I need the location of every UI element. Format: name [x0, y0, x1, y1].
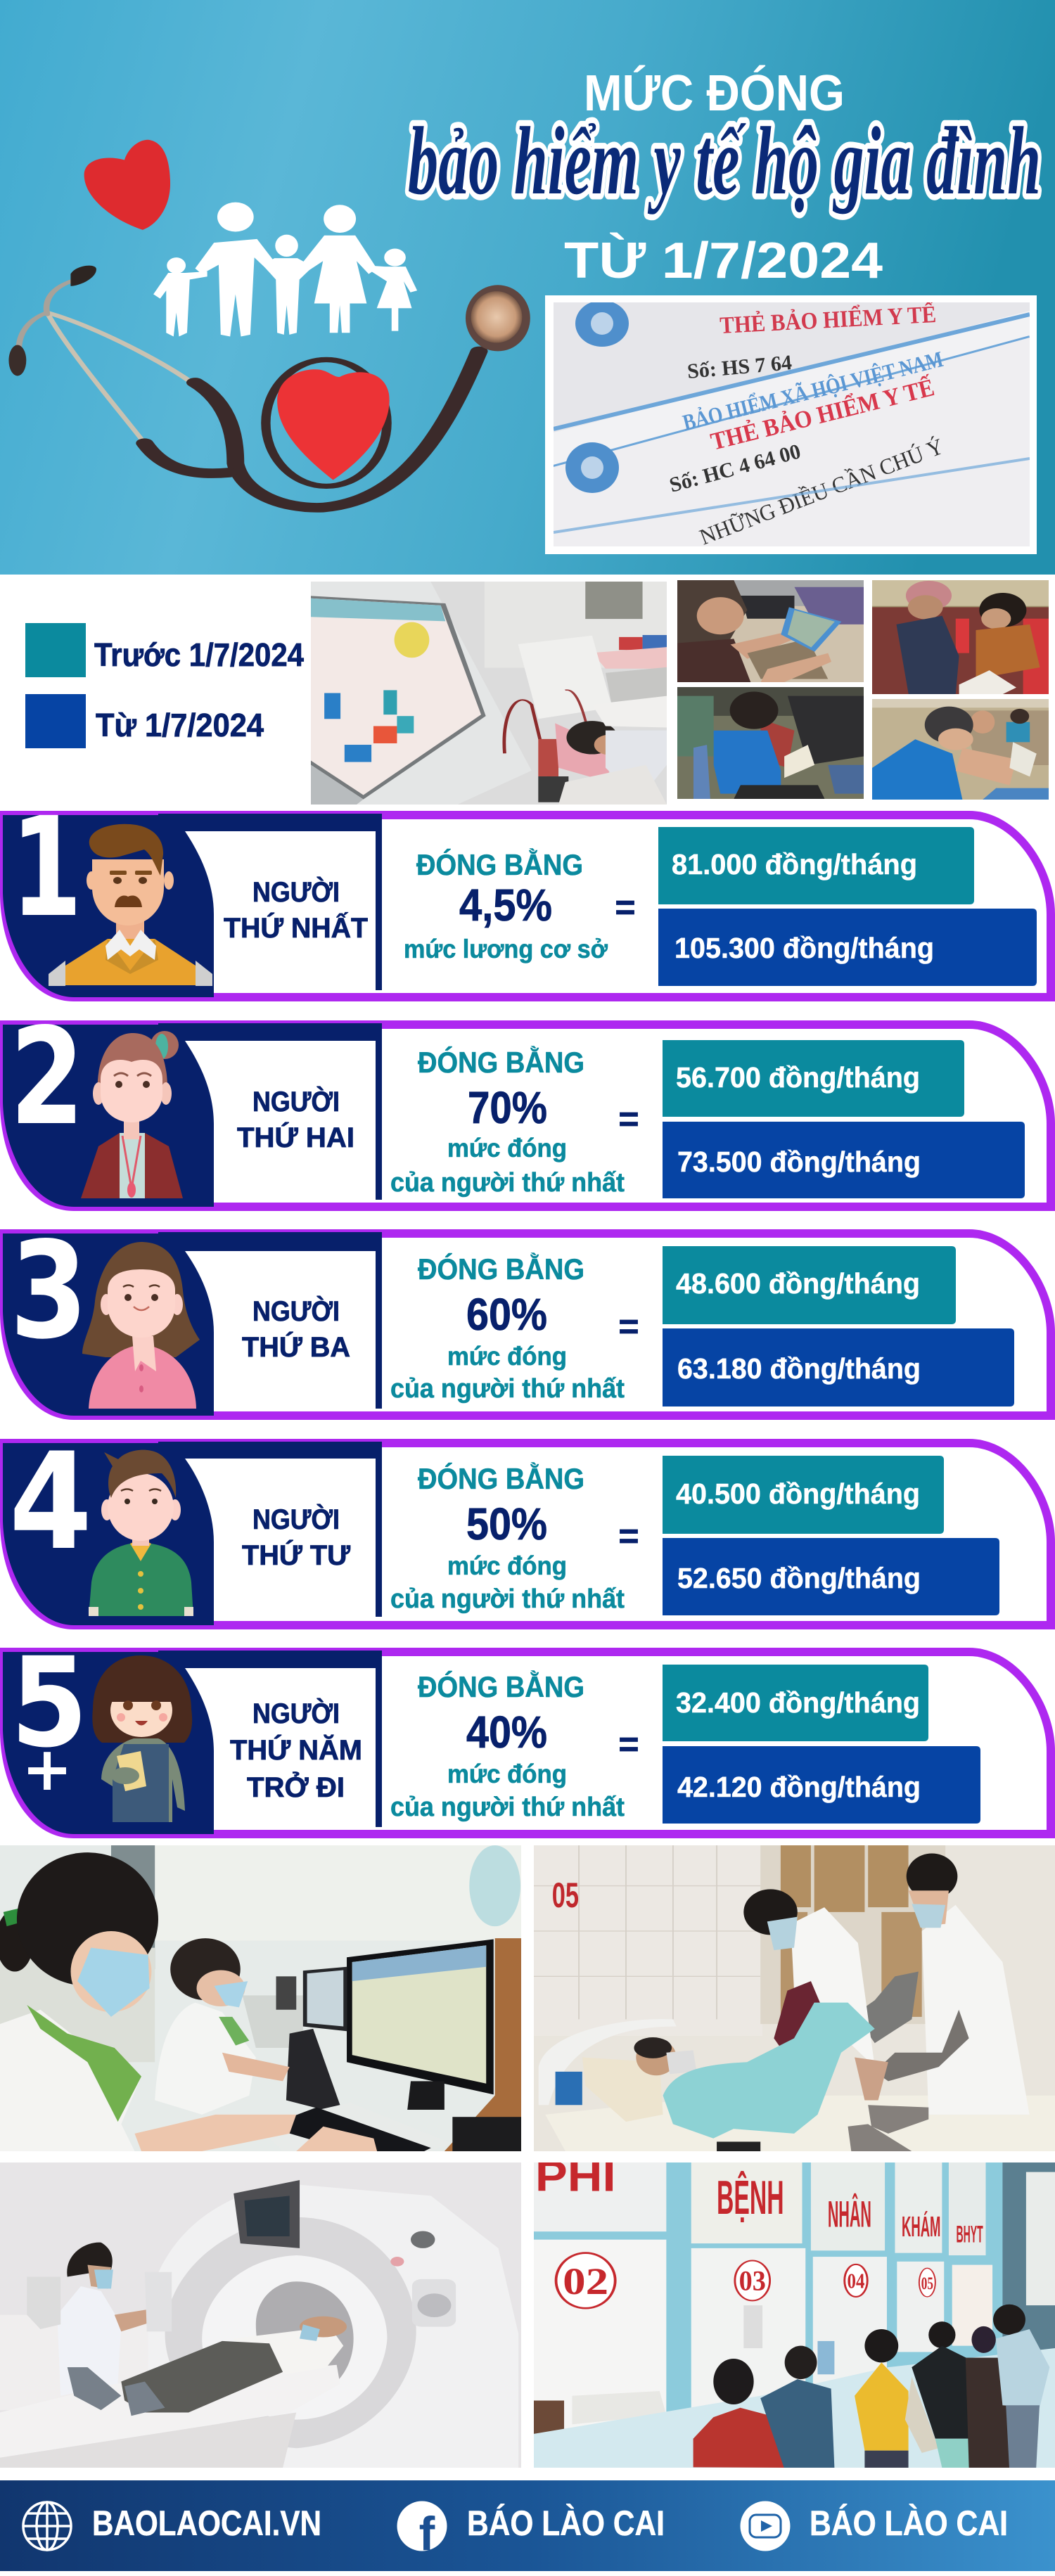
row label: NGƯỜI	[252, 1503, 340, 1535]
legend label: before: Trước 1/7/2024	[94, 636, 304, 673]
icon: globe	[23, 2502, 71, 2550]
photo: hospital reception nurses	[0, 1845, 521, 2151]
bar after	[658, 909, 1037, 986]
photo: hospital counters: NHÂN	[828, 2193, 871, 2235]
left navy tab	[3, 814, 382, 997]
panel: card 5: THỨ NĂM	[230, 1734, 362, 1766]
bar after value: 105.300 đồng/tháng	[674, 932, 934, 964]
equals sign: =	[615, 887, 636, 927]
counter signage: PHÍ	[535, 2153, 618, 2200]
photo: insurance cards: NHỮNG ĐIỀU CẦN CHÚ Ý	[696, 433, 947, 550]
number: 5	[11, 1631, 88, 1775]
bar before	[663, 1040, 964, 1117]
rate heading: ĐÓNG BẰNG	[416, 847, 583, 881]
photo: staff in blue shirt	[872, 699, 1049, 800]
bar before value: 81.000 đồng/tháng	[672, 848, 917, 880]
bar before value: 56.700 đồng/tháng	[676, 1061, 920, 1094]
legend swatch: before	[25, 623, 86, 677]
rate value: 70%	[468, 1082, 547, 1133]
photo: insurance cards	[545, 295, 1037, 554]
avatar: boy in green shirt	[89, 1450, 193, 1616]
panel: card 5	[0, 1631, 1055, 1838]
title line: mức đóng: MỨC ĐÓNG	[584, 65, 845, 122]
rate basis: mức lương cơ sở	[404, 935, 608, 963]
rate heading: ĐÓNG BẰNG	[418, 1252, 584, 1286]
photo: hospital counters: 05	[921, 2273, 933, 2293]
equals sign: =	[618, 1307, 639, 1346]
photo: hospital counters: BHYT	[956, 2222, 983, 2248]
number: 4	[9, 1424, 92, 1579]
bar before value: 40.500 đồng/tháng	[676, 1478, 920, 1510]
left navy tab	[3, 1651, 382, 1834]
left navy tab	[3, 1023, 382, 1207]
rate heading: ĐÓNG BẰNG	[418, 1461, 584, 1495]
rate heading: ĐÓNG BẰNG	[418, 1670, 584, 1703]
bar before value: 48.600 đồng/tháng	[676, 1267, 920, 1300]
photo: doctors examining patient: 05	[552, 1875, 579, 1915]
row label: NGƯỜI	[252, 876, 340, 908]
footer label: youtube: BÁO LÀO CAI	[810, 2504, 1008, 2543]
footer label: website: BAOLAOCAI.VN	[92, 2504, 321, 2543]
illustration: hearts, paper family and stethoscope	[8, 139, 530, 513]
left navy tab	[3, 1442, 382, 1625]
card text upper: THẺ BẢO HIỂM Y TẾ	[719, 300, 937, 339]
legend: before and after	[25, 623, 304, 748]
bar before	[663, 1456, 944, 1534]
panel: card 4: của người thứ nhất	[390, 1584, 625, 1614]
footer label: facebook: BÁO LÀO CAI	[467, 2504, 665, 2543]
equals sign: =	[618, 1516, 639, 1556]
photo: woman reading leaflet	[677, 580, 864, 682]
rate heading: ĐÓNG BẰNG	[418, 1045, 584, 1079]
bar after value: 42.120 đồng/tháng	[677, 1771, 921, 1803]
icon: youtube	[740, 2501, 791, 2551]
photo: hospital counters	[534, 2153, 1055, 2468]
title line: date: TỪ 1/7/2024	[564, 232, 883, 289]
rate value: 50%	[466, 1499, 547, 1549]
photo: doctors examining patient	[534, 1845, 1055, 2151]
card text agency: BẢO HIỂM XÃ HỘI VIỆT NAM	[680, 346, 945, 435]
equals sign: =	[618, 1724, 639, 1764]
avatar: girl with book	[92, 1655, 192, 1822]
panel: card 3	[0, 1213, 1055, 1420]
panel: card 3: của người thứ nhất	[390, 1374, 625, 1404]
bar before	[663, 1246, 956, 1324]
avatar: woman with long hair	[82, 1242, 200, 1409]
panel: card 2: của người thứ nhất	[390, 1168, 625, 1198]
rate value: 60%	[466, 1289, 547, 1340]
photo: CT scanner	[0, 2162, 521, 2468]
bar before value: 32.400 đồng/tháng	[676, 1686, 920, 1719]
bar after value: 52.650 đồng/tháng	[677, 1562, 921, 1594]
bar after value: 63.180 đồng/tháng	[677, 1352, 921, 1385]
photo: two women with papers	[872, 580, 1049, 694]
panel: card 1	[0, 788, 1055, 1001]
icon: facebook: f	[419, 2507, 435, 2561]
legend label: after: Từ 1/7/2024	[96, 707, 264, 743]
panel: card 4	[0, 1424, 1055, 1629]
panel: card 4: THỨ TƯ	[242, 1539, 351, 1571]
icon: facebook	[397, 2501, 447, 2561]
legend swatch: after	[25, 694, 86, 748]
photo: insurance cards: Số: HC 4 64 00	[667, 440, 803, 497]
photo: dialysis machine	[311, 582, 667, 805]
card frame	[0, 1648, 1055, 1838]
rate value: 40%	[466, 1707, 547, 1757]
plus sign: +	[22, 1734, 72, 1805]
panel: hero banner	[0, 0, 1055, 575]
panel: card 5: của người thứ nhất	[390, 1793, 625, 1822]
photo: hospital counters: 04	[848, 2269, 864, 2293]
avatar: woman with bun	[81, 1031, 183, 1198]
equals sign: =	[618, 1099, 639, 1139]
number: 3	[10, 1213, 88, 1369]
number: 1	[11, 788, 82, 947]
bar after	[663, 1746, 980, 1824]
rate basis: mức đóng	[447, 1134, 567, 1162]
rate basis: mức đóng	[447, 1760, 567, 1788]
panel: card 3: THỨ BA	[242, 1331, 350, 1363]
row label: NGƯỜI	[252, 1697, 340, 1729]
row label: NGƯỜI	[252, 1295, 340, 1327]
left navy tab	[3, 1232, 382, 1416]
card frame	[0, 1229, 1055, 1420]
bar after	[663, 1328, 1014, 1406]
photo: insurance cards: Số: HS 7 64	[686, 351, 793, 383]
photo: hospital counters: 03	[739, 2264, 766, 2296]
card frame	[0, 811, 1055, 1001]
row label: NGƯỜI	[252, 1085, 340, 1117]
bar before	[658, 827, 974, 904]
bar after	[663, 1122, 1025, 1198]
panel: card 5: TRỞ ĐI	[247, 1771, 345, 1803]
photo: hospital counters: 02	[563, 2260, 608, 2302]
bar before	[663, 1665, 928, 1741]
photo: hospital counters: KHÁM	[902, 2210, 940, 2243]
number: 2	[10, 999, 84, 1155]
panel: footer bar	[0, 2480, 1055, 2571]
card text lower: THẺ BẢO HIỂM Y TẾ	[708, 373, 937, 456]
photo: hospital counters: BỆNH	[717, 2171, 784, 2224]
rate basis: mức đóng	[447, 1551, 567, 1580]
card frame	[0, 1439, 1055, 1629]
panel: card 1: THỨ NHẤT	[224, 911, 368, 944]
rate value: 4,5%	[459, 880, 552, 930]
panel: card 2: THỨ HAI	[237, 1121, 354, 1153]
bar after value: 73.500 đồng/tháng	[677, 1146, 921, 1178]
avatar: man with moustache	[49, 824, 212, 986]
photo: people sitting with leaflet	[677, 687, 864, 799]
panel: card 2	[0, 999, 1055, 1211]
bar after	[663, 1538, 999, 1615]
card frame	[0, 1020, 1055, 1211]
rate basis: mức đóng	[447, 1342, 567, 1371]
